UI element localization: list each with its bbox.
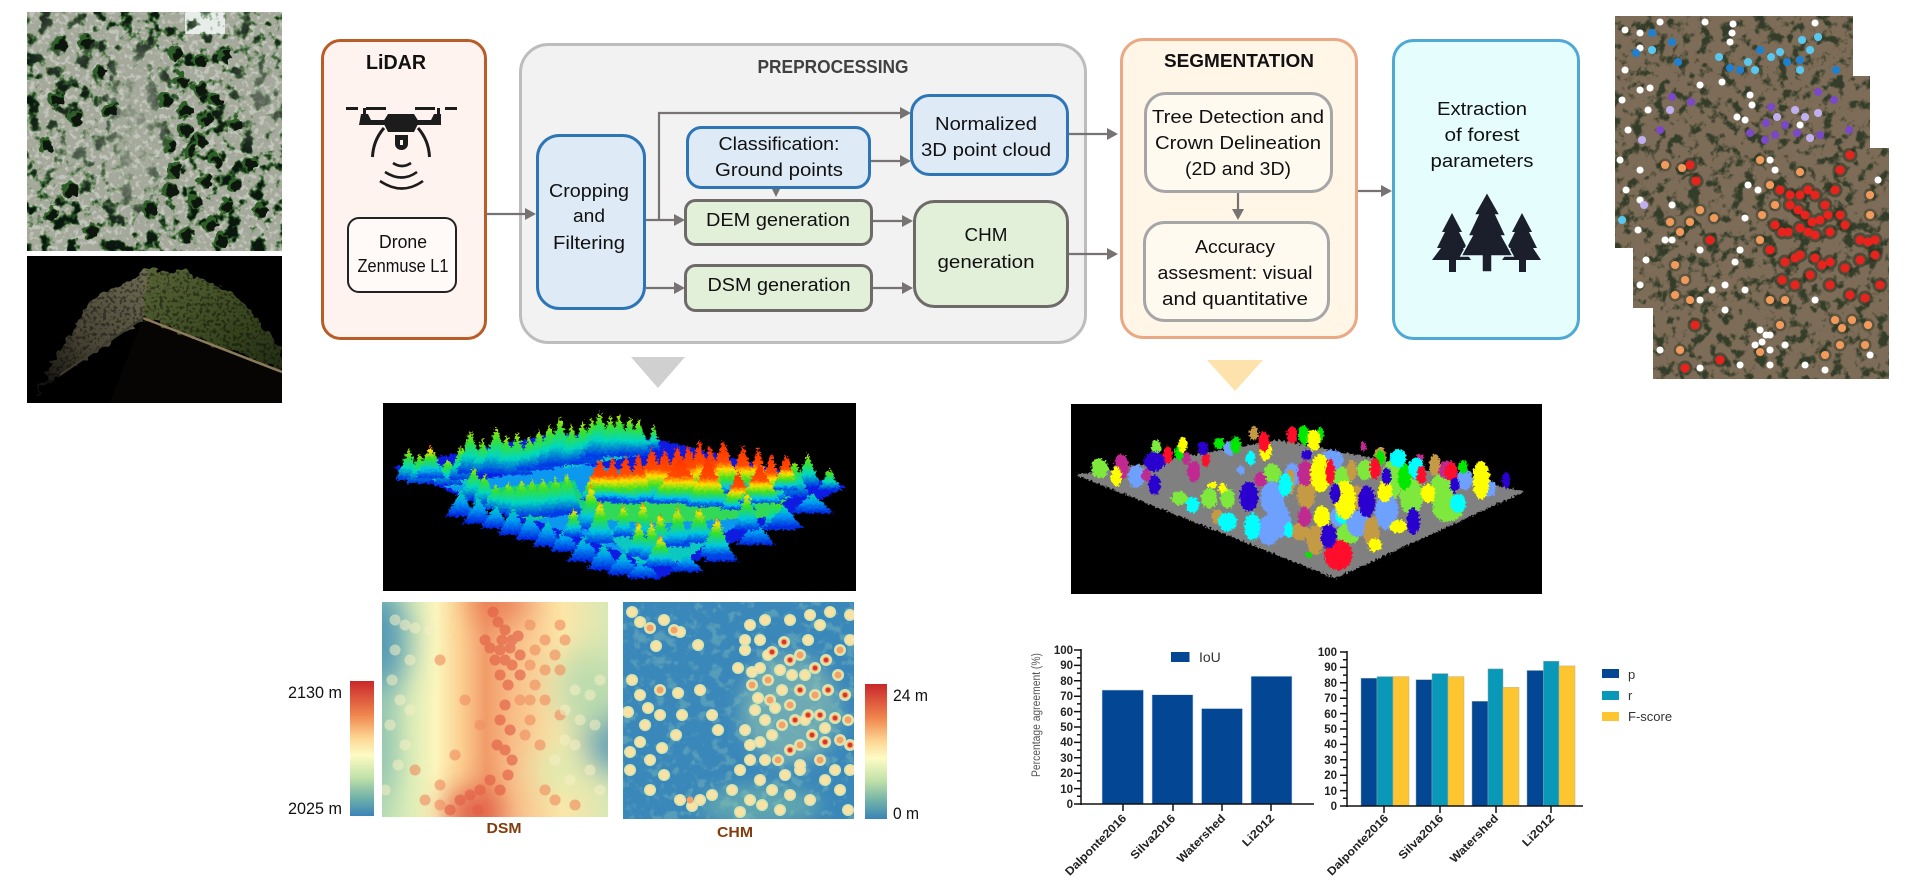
legend: metrics: r: [1628, 688, 1633, 703]
LiDAR heading: LiDAR: [366, 52, 427, 74]
arrow: cropping to DSM: [646, 282, 685, 294]
y axis labels: 50: [1324, 724, 1337, 736]
box: cropping and filtering: Filtering: [553, 233, 625, 253]
y axis labels: 80: [1324, 678, 1337, 690]
box: normalized 3D point cloud: Normalized: [935, 114, 1037, 134]
y axis labels: 0: [1067, 799, 1073, 811]
y axis labels: 100: [1318, 647, 1337, 659]
y axis labels: 70: [1060, 691, 1073, 703]
y axis labels: [1054, 645, 1073, 811]
x axis labels: [1063, 813, 1277, 878]
layer: blue crowns: [1615, 16, 1853, 248]
colour bar: CHM height: 24 m: [893, 686, 928, 705]
arrow: DSM to CHM: [873, 282, 913, 294]
icon: drone with signal waves: [346, 107, 457, 188]
preprocessing heading: PREPROCESSING: [758, 57, 908, 77]
panel: extraction of forest parameters: [1394, 40, 1578, 338]
box: tree detection and crown delineation: (2D and 3D): [1185, 159, 1291, 179]
y axis labels: 60: [1324, 709, 1337, 721]
box: CHM generation: CHM: [964, 225, 1008, 245]
box: tree detection and crown delineation: Tree Detection and: [1152, 107, 1324, 127]
box: DSM generation: DSM generation: [708, 275, 850, 295]
arrow: cropping to DEM: [646, 214, 685, 226]
arrow: CHM to segmentation: [1069, 248, 1118, 260]
y axis labels: 100: [1054, 645, 1073, 657]
x axis labels: Watershed: [1448, 813, 1501, 866]
map: CHM: [623, 602, 854, 825]
box: tree detection and crown delineation: [1146, 94, 1332, 192]
panel: extraction of forest parameters: Extraction: [1437, 99, 1527, 119]
colour bar: CHM height: [865, 684, 928, 823]
bars: p: [1361, 670, 1544, 806]
x axis labels: Silva2016: [1397, 813, 1446, 862]
y axis labels: 80: [1060, 676, 1073, 688]
y axis labels: 50: [1060, 722, 1073, 734]
x axis labels: Watershed: [1175, 813, 1228, 866]
panel: extraction of forest parameters: of forest: [1444, 125, 1520, 145]
box: cropping and filtering: Cropping: [549, 181, 629, 201]
y axis labels: 20: [1324, 770, 1337, 782]
CHM label: CHM: [717, 824, 753, 841]
y axis labels: 30: [1324, 755, 1337, 767]
legend: IoU: IoU: [1199, 649, 1221, 665]
colour bar: DSM elevation: 2025 m: [288, 799, 342, 818]
y axis labels: [1318, 647, 1337, 813]
legend: metrics: [1602, 667, 1672, 724]
layer: purple crowns: [1633, 76, 1870, 308]
colour bar: DSM elevation: [288, 681, 374, 818]
box: accuracy assessment: Accuracy: [1195, 237, 1275, 257]
box: DEM generation: DEM generation: [706, 210, 850, 230]
DSM label: DSM: [486, 820, 522, 837]
box: CHM generation: generation: [938, 252, 1034, 272]
arrow: detection to accuracy: [1232, 193, 1244, 220]
colour bar: CHM height: 0 m: [893, 804, 919, 823]
arrow: segmentation results: [1207, 360, 1263, 391]
x axis labels: Li2012: [1240, 813, 1277, 849]
segmentation heading: SEGMENTATION: [1164, 51, 1314, 71]
Drone Zenmuse L1 box: Zenmuse L1: [358, 256, 448, 276]
colour bar: DSM elevation: 2130 m: [288, 683, 342, 702]
y axis labels: 70: [1324, 693, 1337, 705]
arrow: classification to DEM: [772, 189, 780, 197]
bars: F-score: [1393, 666, 1575, 806]
x axis labels: Silva2016: [1129, 813, 1178, 862]
box: cropping and filtering: [538, 136, 644, 308]
panel: LiDAR: [322, 40, 486, 338]
box: accuracy assessment: [1144, 222, 1328, 320]
y axis labels: 90: [1060, 660, 1073, 672]
legend: IoU: [1171, 649, 1221, 665]
y axis labels: 40: [1060, 737, 1073, 749]
arrow: classification to normalized: [871, 155, 911, 167]
y axis labels: 40: [1324, 739, 1337, 751]
y axis labels: 30: [1060, 753, 1073, 765]
panel: preprocessing: [520, 44, 1086, 342]
y axis labels: 60: [1060, 707, 1073, 719]
arrow: preprocessing results: [631, 357, 685, 388]
box: DEM generation: [686, 200, 872, 244]
arrow: cropping to normalized: [659, 107, 911, 220]
bar chart: IoU: [1031, 645, 1314, 878]
Drone Zenmuse L1 box: [348, 218, 456, 292]
box: CHM generation: [914, 202, 1068, 306]
box: normalized 3D point cloud: 3D point cloud: [921, 140, 1051, 160]
panel: segmentation: [1122, 40, 1356, 338]
3D height-coloured point cloud: [383, 403, 856, 591]
x axis labels: Li2012: [1520, 813, 1557, 849]
Drone Zenmuse L1 box: Drone: [379, 232, 427, 252]
bar chart: p, r and F-score: [1318, 647, 1672, 878]
map: DSM: [382, 602, 608, 817]
panel: extraction of forest parameters: parameters: [1430, 151, 1534, 171]
photo: 3D point cloud of hillside: [27, 256, 282, 403]
arrow: normalized to segmentation: [1069, 128, 1118, 140]
icon: three trees: [1432, 192, 1541, 272]
arrow: DEM to CHM: [873, 215, 913, 227]
x axis labels: Dalponte2016: [1063, 813, 1129, 878]
y axis labels: 90: [1324, 662, 1337, 674]
x axis labels: Dalponte2016: [1325, 813, 1391, 878]
box: classification ground points: [688, 128, 870, 188]
3D segmented tree crowns: [1071, 404, 1542, 594]
box: normalized 3D point cloud: [912, 96, 1068, 174]
box: tree detection and crown delineation: Crown Delineation: [1155, 133, 1321, 153]
x axis labels: [1325, 813, 1557, 878]
y axis title: Percentage agreement (%): [1031, 653, 1043, 777]
y axis labels: 20: [1060, 768, 1073, 780]
y axis labels: 0: [1331, 801, 1337, 813]
box: cropping and filtering: and: [573, 206, 605, 226]
arrow: LiDAR to preprocessing: [486, 208, 536, 220]
photo stack: detected tree crowns: [1615, 16, 1889, 379]
arrow: segmentation to extraction: [1358, 185, 1392, 197]
layer: red and orange crowns: [1653, 148, 1889, 379]
box: classification ground points: Ground points: [715, 160, 843, 180]
box: classification ground points: Classification:: [718, 134, 840, 154]
bars: [1102, 676, 1292, 804]
legend: metrics: p: [1628, 667, 1635, 682]
bars: r: [1377, 661, 1559, 806]
legend: metrics: F-score: [1628, 709, 1672, 724]
y axis labels: 10: [1060, 784, 1073, 796]
box: accuracy assessment: and quantitative: [1162, 289, 1308, 309]
aerial photo of forest: [27, 12, 282, 251]
box: DSM generation: [686, 266, 872, 310]
y axis labels: 10: [1324, 786, 1337, 798]
box: accuracy assessment: assesment: visual: [1158, 263, 1312, 283]
